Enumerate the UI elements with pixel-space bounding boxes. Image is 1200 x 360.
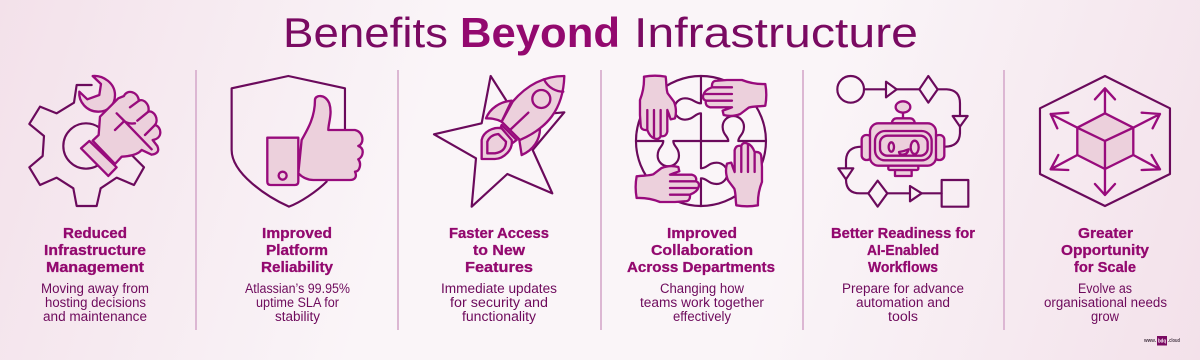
icon: gear, wrench and fist — [29, 76, 160, 206]
text: description 2: uptime SLA for — [256, 295, 339, 310]
text: description 2: stability — [275, 309, 320, 324]
title — [283, 9, 918, 56]
heading: better readiness: AI-Enabled — [867, 242, 939, 259]
title: Benefits — [283, 9, 448, 56]
logo: www.bdq.cloud — [1143, 336, 1180, 346]
heading: improved platform reliability: Platform — [266, 242, 328, 259]
heading: faster access — [449, 225, 549, 276]
heading: greater opportunity: Greater — [1078, 225, 1133, 242]
panel: improved collaboration — [627, 76, 775, 324]
heading: faster access: Features — [465, 259, 533, 276]
icon: star with rocket — [434, 76, 564, 207]
text: description 1: and maintenance — [43, 309, 147, 324]
heading: faster access: Faster Access — [449, 225, 549, 242]
text: description 1: Moving away from — [41, 281, 149, 296]
logo: www.bdq.cloud: www. — [1143, 338, 1156, 344]
panel: better readiness for AI — [831, 76, 975, 324]
icon: hexagon with cube and arrows — [1040, 76, 1170, 206]
heading: reduced infrastructure management: Reduced — [63, 225, 127, 242]
text: description 5: tools — [888, 309, 918, 324]
text: description 4: teams work together — [640, 295, 765, 310]
text: description 6 — [1044, 281, 1167, 324]
icon: shield with thumbs up — [232, 76, 363, 207]
text: description 5: Prepare for advance — [842, 281, 964, 296]
text: description 1: hosting decisions — [45, 295, 146, 310]
heading: improved platform reliability — [261, 225, 334, 276]
heading: improved collaboration: Improved — [667, 225, 737, 242]
text: description 5: automation and — [856, 295, 950, 310]
text: description 3: functionality — [462, 309, 536, 324]
text: description 3: for security and — [450, 295, 548, 310]
text: description 4: Changing how — [660, 281, 744, 296]
text: description 5 — [842, 281, 964, 324]
heading: greater opportunity: Opportunity — [1061, 242, 1150, 259]
text: description 6: organisational needs — [1044, 295, 1167, 310]
text: description 4: effectively — [673, 309, 731, 324]
panel: greater opportunity for scale — [1040, 76, 1170, 324]
heading: improved platform reliability: Improved — [262, 225, 332, 242]
icon: robot with flowchart — [837, 76, 968, 207]
panel: improved platform reliability — [232, 76, 363, 324]
title: Infrastructure — [634, 9, 918, 56]
title: Beyond — [460, 9, 620, 56]
panel: faster access to new features — [434, 76, 564, 324]
text: description 2: Atlassian’s 99.95% — [245, 281, 350, 296]
text: description 6: Evolve as — [1078, 281, 1132, 296]
heading: improved collaboration: Collaboration — [651, 242, 753, 259]
heading: better readiness: Workflows — [868, 259, 938, 276]
logo: www.bdq.cloud: .cloud — [1168, 338, 1180, 344]
heading: better readiness — [831, 225, 975, 276]
heading: greater opportunity: for Scale — [1074, 259, 1136, 276]
heading: reduced infrastructure management — [44, 225, 146, 276]
logo: www.bdq.cloud: bdq — [1158, 338, 1166, 344]
heading: improved platform reliability: Reliability — [261, 259, 334, 276]
text: description 4 — [640, 281, 765, 324]
heading: greater opportunity — [1061, 225, 1150, 276]
text: description 3 — [441, 281, 557, 324]
heading: reduced infrastructure management: Management — [46, 259, 144, 276]
heading: improved collaboration — [627, 225, 775, 276]
text: description 6: grow — [1091, 309, 1119, 324]
icon: puzzle circle with four hands — [636, 76, 766, 206]
text: description 2 — [245, 281, 350, 324]
text: description 3: Immediate updates — [441, 281, 557, 296]
text: description 1 — [41, 281, 149, 324]
heading: faster access: to New — [473, 242, 525, 259]
heading: improved collaboration: Across Departments — [627, 259, 775, 276]
heading: reduced infrastructure management: Infrastructure — [44, 242, 146, 259]
heading: better readiness: Better Readiness for — [831, 225, 975, 242]
panel: reduced infrastructure management — [29, 76, 160, 324]
